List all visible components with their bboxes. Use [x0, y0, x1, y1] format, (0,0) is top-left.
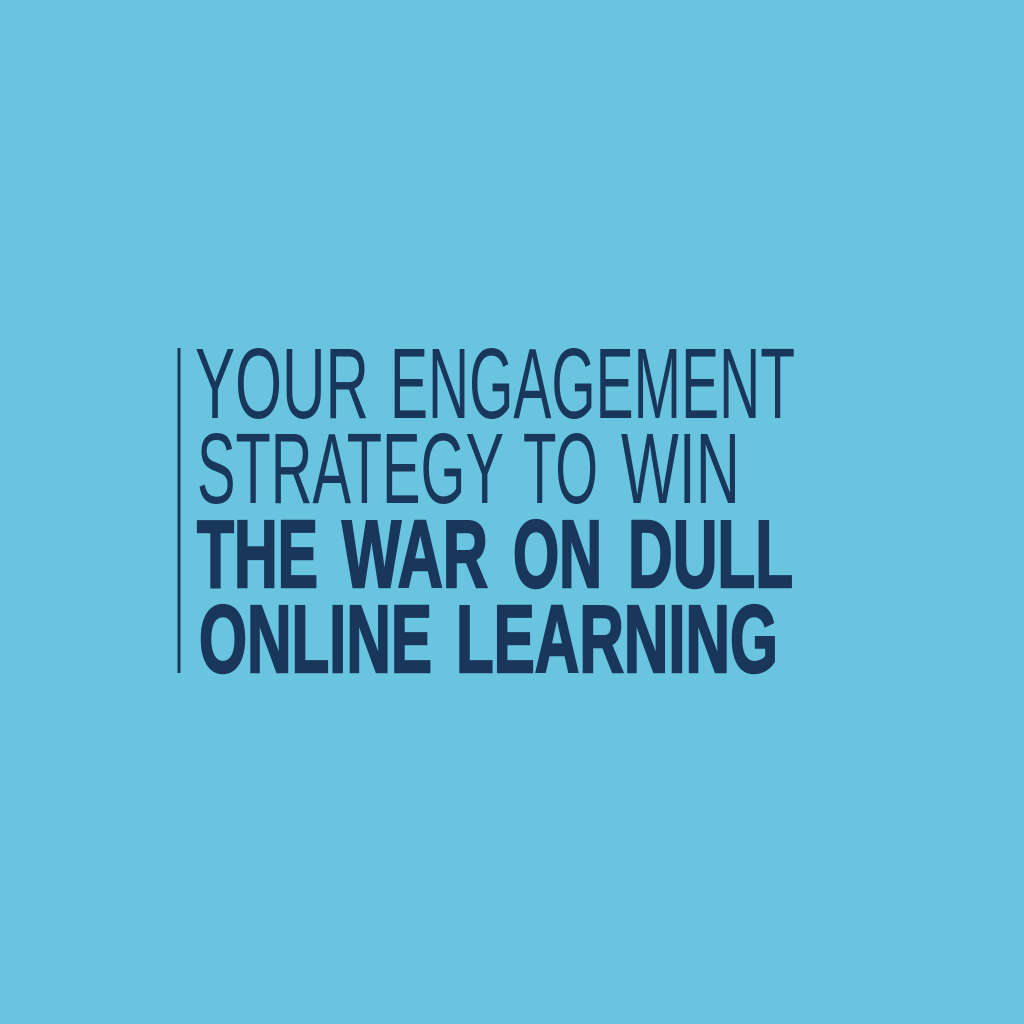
title line 3: ON — [513, 501, 602, 608]
title line 1 — [195, 328, 795, 440]
vertical accent rule — [178, 348, 180, 673]
title block — [195, 328, 795, 693]
title line 4: ONLINE — [199, 586, 432, 693]
title line 2: STRATEGY — [197, 413, 504, 525]
title line 3: WAR — [342, 501, 488, 608]
title line 3 — [197, 501, 793, 608]
title line 4 — [199, 586, 778, 693]
title line 2: WIN — [621, 413, 740, 525]
title line 1: YOUR — [195, 328, 369, 440]
title line 3: DULL — [628, 501, 793, 608]
title line 4: LEARNING — [456, 586, 778, 693]
title line 3: THE — [197, 501, 318, 608]
title line 2: TO — [523, 413, 598, 525]
